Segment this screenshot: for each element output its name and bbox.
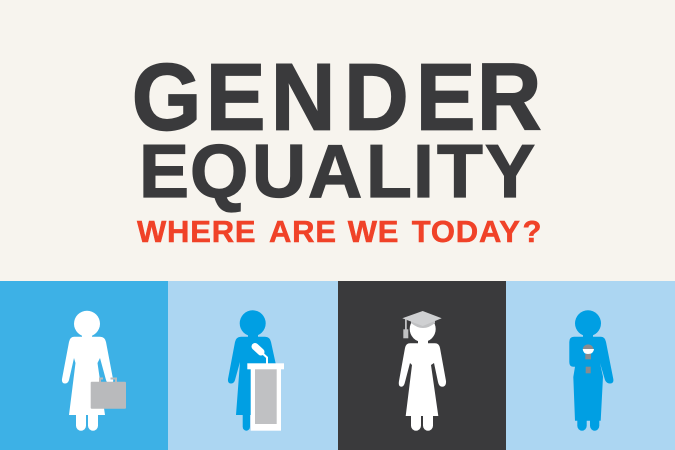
panel: graduate <box>338 281 506 450</box>
panel: business woman <box>0 281 168 450</box>
subtitle: TODAY <box>412 214 521 249</box>
subtitle: WHERE <box>137 214 256 249</box>
icon: woman figure <box>62 311 113 431</box>
icon: podium <box>247 363 284 431</box>
panel: woman at podium <box>168 281 338 450</box>
icon: woman figure <box>569 310 613 431</box>
subtitle: WE <box>348 214 399 249</box>
subtitle: ARE <box>269 214 337 249</box>
icon: mortarboard <box>402 311 442 338</box>
panel: woman with microphone <box>506 281 675 450</box>
icon: briefcase <box>91 378 126 409</box>
icon: graduate figure <box>399 316 446 431</box>
title: gender: GENDER <box>132 44 541 150</box>
icon: woman figure <box>228 310 276 431</box>
icon: microphone <box>583 344 594 373</box>
subtitle: ? <box>522 214 542 249</box>
icon: microphone <box>255 346 267 364</box>
title: equality: EQUALITY <box>139 129 535 213</box>
